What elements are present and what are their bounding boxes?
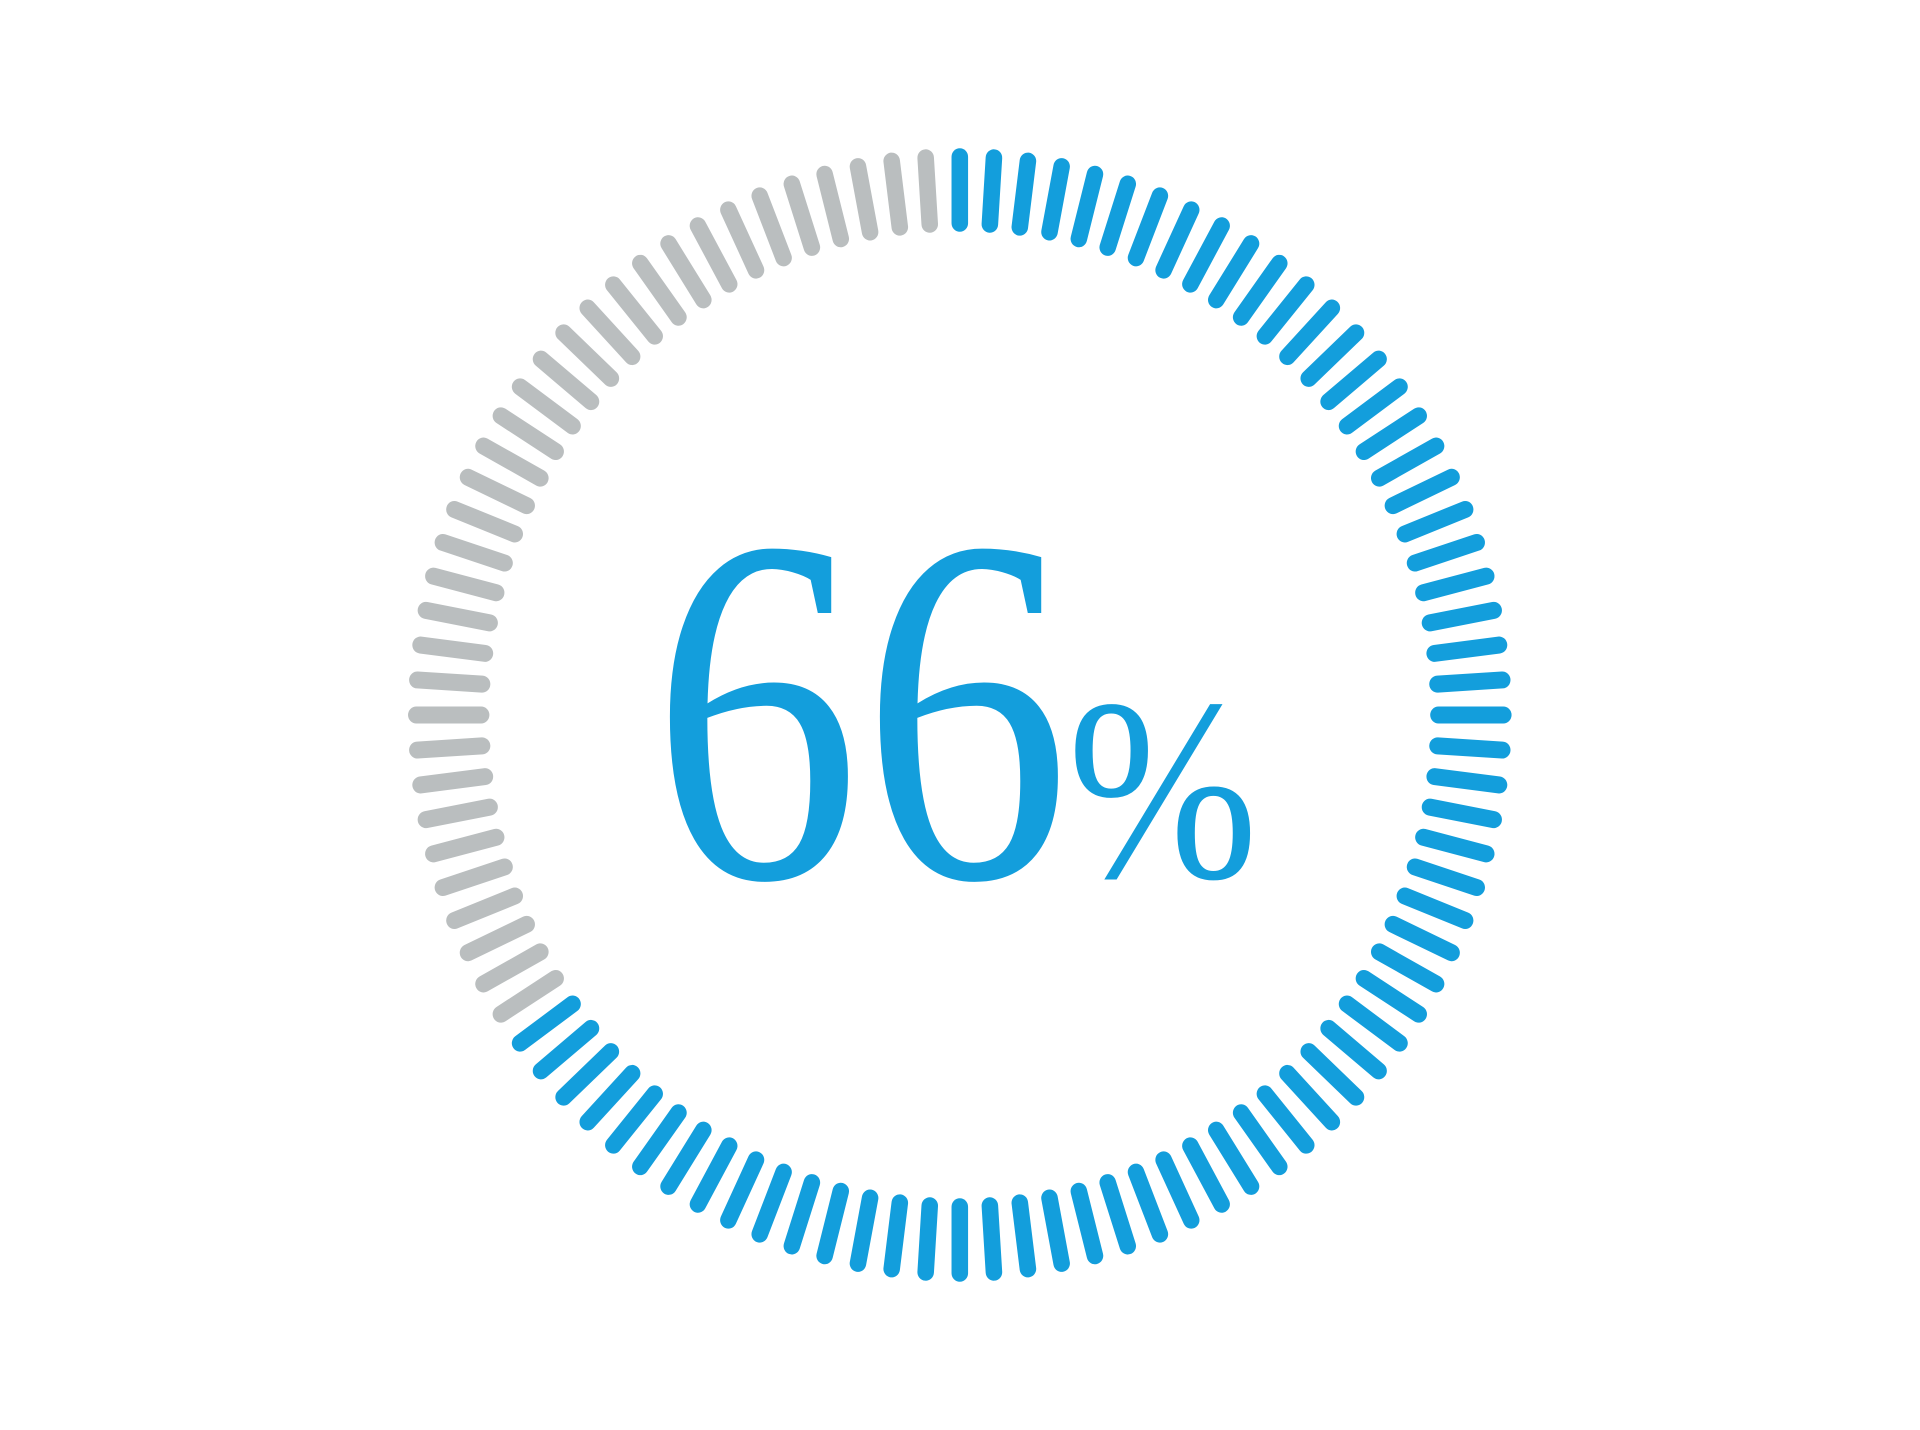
percent sign: % bbox=[1068, 645, 1258, 933]
gray ticks: remaining 34 of 100 bbox=[416, 158, 930, 1014]
number: 66: 66 bbox=[652, 436, 1070, 985]
blue ticks: 66 of 100 filled bbox=[520, 157, 1503, 1273]
